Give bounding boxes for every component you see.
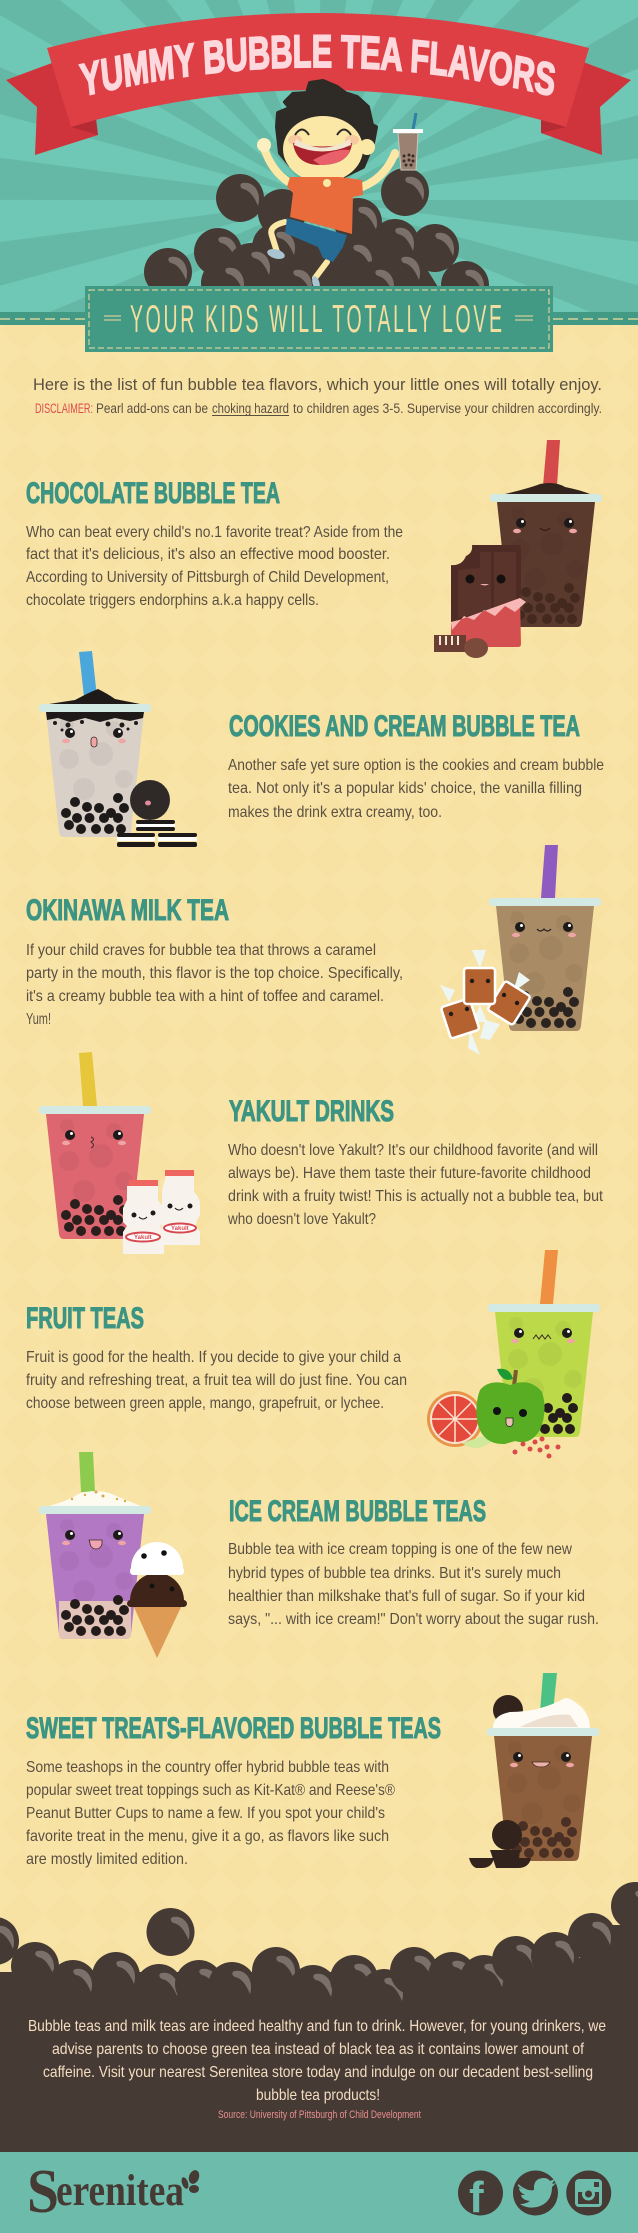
panel: fruit teas [26,1302,407,1412]
source: Source: University of Pittsburgh of Child Development [218,2109,421,2121]
panel: sweet treats-flavored bubble teas: Some teashops in the country offer hybrid bubble teas with [26,1759,389,1776]
disclaimer: to children ages 3-5. Supervise your children accordingly. [293,401,602,416]
title text: YUMMY BUBBLE TEA FLAVORS [78,34,556,96]
panel: yakult drinks: drink with a fruity twist! This is actually not a bubble tea, but [228,1188,603,1205]
panel: chocolate bubble tea: Who can beat every child's no.1 favorite treat? Aside from the [26,524,403,541]
panel: chocolate bubble tea: CHOCOLATE BUBBLE TEA [26,477,280,510]
logo: Serenitea [27,2158,201,2226]
icon: okinawa cup with caramels [440,845,601,1055]
subtitle box: YOUR KIDS WILL TOTALLY LOVE [130,297,502,341]
panel: ice cream bubble teas: Bubble tea with ice cream topping is one of the few new [228,1541,572,1558]
icon: cookies cup with oreos [39,651,197,847]
panel: cookies and cream [228,710,604,821]
boy holding bubble tea [257,81,423,291]
panel: fruit teas: Fruit is good for the health. If you decide to give your child a [26,1349,401,1366]
panel: fruit teas: FRUIT TEAS [26,1302,144,1335]
panel: ice cream bubble teas: says, "... with ice cream!" Don't worry about the sugar rush. [228,1611,599,1628]
panel: okinawa milk tea: party in the mouth, this flavor is the top choice. Specifically, [26,965,403,982]
panel: cookies and cream: tea. Not only it's a popular kids' choice, the vanilla filling [228,780,582,797]
title ribbon [6,13,631,155]
icon: purple cup with ice cream cone [39,1452,187,1658]
subtitle box [85,286,553,352]
pearl pile [144,168,489,286]
footer bar [0,2152,638,2233]
panel: fruit teas: fruity and refreshing treat, a fruit tea will do just fine. You can [26,1372,407,1389]
panel: okinawa milk tea: OKINAWA MILK TEA [26,894,229,927]
panel: sweet treats-flavored bubble teas [26,1712,441,1868]
icon: facebook: f [469,2173,484,2222]
icon: chocolate cup with bar [434,440,602,658]
closing text: bubble tea products! [256,2087,380,2104]
panel: yakult drinks: YAKULT DRINKS [229,1095,394,1128]
panel: okinawa milk tea [26,894,403,1028]
panel: ice cream bubble teas: healthier than milkshake that's full of sugar. So if your kid [228,1588,585,1605]
disclaimer: DISCLAIMER: [35,401,93,416]
icon: twitter [513,2170,558,2216]
panel: chocolate bubble tea: According to University of Pittsburgh of Child Development, [26,569,389,586]
panel: sweet treats-flavored bubble teas: favorite treat in the menu, give it a go, as flavors like such [26,1828,389,1845]
panel: okinawa milk tea: If your child craves for bubble tea that throws a caramel [26,942,376,959]
panel: yakult drinks: always be). Have them taste their future-favorite childhood [228,1165,591,1182]
panel: sweet treats-flavored bubble teas: are mostly limited edition. [26,1851,188,1868]
icon: yakult cup with bottles [39,1052,200,1254]
panel: chocolate bubble tea: chocolate triggers endorphins a.k.a happy cells. [26,592,319,609]
panel: yakult drinks: who doesn't love Yakult? [227,1211,376,1228]
icon: yakult cup with bottles: Yakult [134,1235,152,1241]
panel: cookies and cream: makes the drink extra creamy, too. [228,804,442,821]
intro text: Here is the list of fun bubble tea flavors, which your little ones will totally enjoy. [33,375,602,394]
panel: yakult drinks [227,1095,603,1228]
disclaimer [35,401,602,416]
disclaimer: choking hazard [212,401,289,416]
bottom pearl border [0,1882,638,2152]
panel: sweet treats-flavored bubble teas: popular sweet treat toppings such as Kit-Kat® and Reese's® [26,1782,395,1799]
panel: chocolate bubble tea [26,477,403,609]
panel: sweet treats-flavored bubble teas: Peanut Butter Cups to name a few. If you spot your child's [26,1805,385,1822]
panel: okinawa milk tea: it's a creamy bubble tea with a hint of toffee and caramel. [26,988,384,1005]
logo: Serenitea: S [27,2158,59,2226]
panel: okinawa milk tea: Yum! [26,1011,51,1028]
header band [0,312,638,325]
icon: instagram [566,2170,611,2216]
panel: fruit teas: choose between green apple, mango, grapefruit, or lychee. [26,1395,384,1412]
panel: sweet treats-flavored bubble teas: SWEET TREATS-FLAVORED BUBBLE TEAS [26,1712,441,1745]
panel: chocolate bubble tea: fact that it's delicious, it's also an effective mood booster. [26,546,390,563]
logo: Serenitea: erenitea [56,2166,184,2215]
header sunburst background [0,0,638,312]
closing text [28,2018,606,2104]
icon: facebook [458,2170,503,2222]
icon: fruit cup with apple and grapefruit [427,1250,600,1458]
panel: ice cream bubble teas: hybrid types of bubble tea drinks. But it's surely much [228,1565,561,1582]
disclaimer: Pearl add-ons can be [96,401,208,416]
icon: yakult cup with bottles: Yakult [171,1226,189,1232]
panel: ice cream bubble teas: ICE CREAM BUBBLE TEAS [229,1495,486,1528]
panel: ice cream bubble teas [228,1495,599,1628]
icon: brown cup with whipped cream [469,1673,599,1868]
